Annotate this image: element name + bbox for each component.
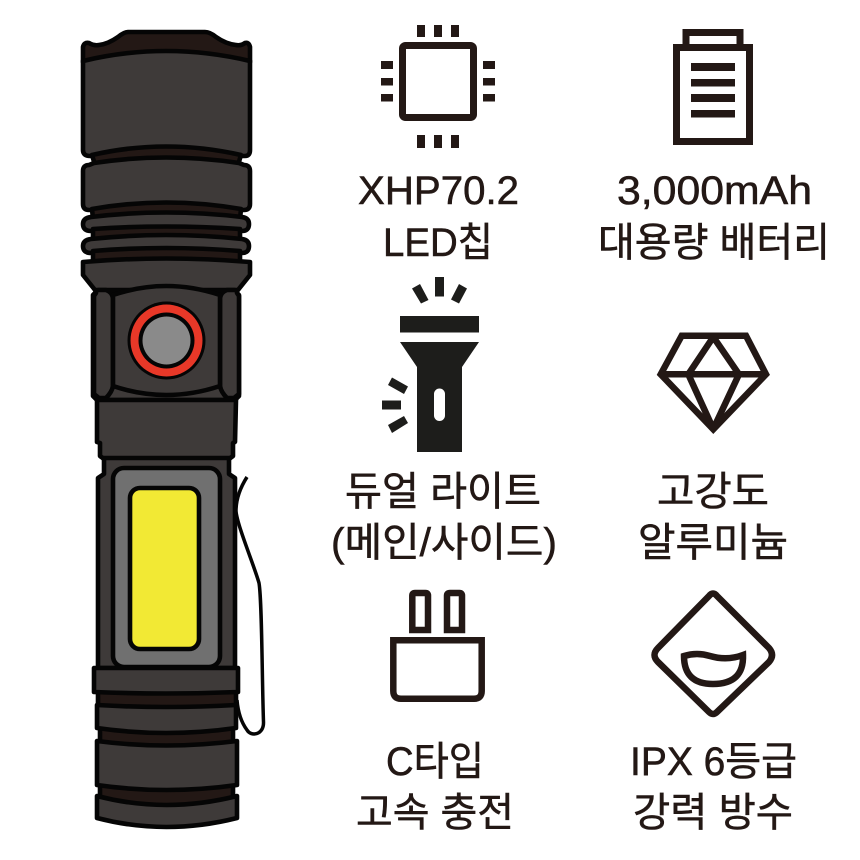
label: dual light: 듀얼 라이트 <box>345 470 541 514</box>
label: battery capacity: 대용량 배터리 <box>598 221 830 265</box>
tail cap <box>97 796 237 827</box>
label: IPX6 waterproof <box>630 740 797 835</box>
label: dual light: (메인/사이드) <box>331 521 557 565</box>
flashlight illustration <box>83 32 264 827</box>
tail segment 1 <box>97 705 236 733</box>
icon: diamond <box>661 336 766 429</box>
tail groove 1 <box>98 690 236 708</box>
power button <box>128 302 206 380</box>
icon: dual flashlight <box>382 277 479 452</box>
bezel top <box>83 32 250 62</box>
tail groove 3 <box>100 783 233 807</box>
label: battery capacity: 3,000mAh <box>617 169 812 213</box>
head collar <box>83 158 250 210</box>
right grip tab <box>220 290 239 398</box>
label: XHP70.2 LED chip <box>358 169 519 265</box>
label: IPX6 waterproof: 강력 방수 <box>633 791 793 835</box>
tail collar <box>94 668 238 694</box>
neck <box>97 400 236 459</box>
cooling groove 3 <box>93 248 240 262</box>
label: high strength aluminum <box>638 470 788 565</box>
icon: waterproof <box>654 594 772 714</box>
head groove <box>92 146 241 165</box>
label: XHP70.2 LED chip: LED칩 <box>383 221 493 265</box>
label: C type fast charging <box>356 740 514 835</box>
head barrel <box>83 51 250 156</box>
lanyard loop <box>236 477 264 734</box>
label: high strength aluminum: 고강도 <box>657 470 769 514</box>
cooling ring 1 <box>83 212 249 231</box>
cooling groove 1 <box>92 202 241 219</box>
label: C type fast charging: 고속 충전 <box>356 791 514 835</box>
label: IPX6 waterproof: IPX 6등급 <box>630 740 797 784</box>
cob yellow lens <box>130 488 199 649</box>
switch shoulder <box>83 258 250 290</box>
label: C type fast charging: C타입 <box>386 740 484 784</box>
left grip tab <box>94 290 113 398</box>
tail groove 2 <box>100 726 233 746</box>
body <box>98 458 235 668</box>
label: XHP70.2 LED chip: XHP70.2 <box>358 169 519 213</box>
label: dual light <box>331 470 557 565</box>
switch panel <box>113 286 220 395</box>
label: battery capacity <box>598 169 830 265</box>
icon: battery <box>676 32 750 142</box>
icon: LED chip <box>381 25 495 148</box>
cob panel <box>113 468 220 667</box>
cooling groove 2 <box>93 226 240 240</box>
tail segment 2 <box>97 741 237 790</box>
label: high strength aluminum: 알루미늄 <box>638 521 788 565</box>
icon: USB-C plug <box>393 593 482 699</box>
cooling ring 2 <box>83 235 249 253</box>
switch housing <box>93 291 239 400</box>
